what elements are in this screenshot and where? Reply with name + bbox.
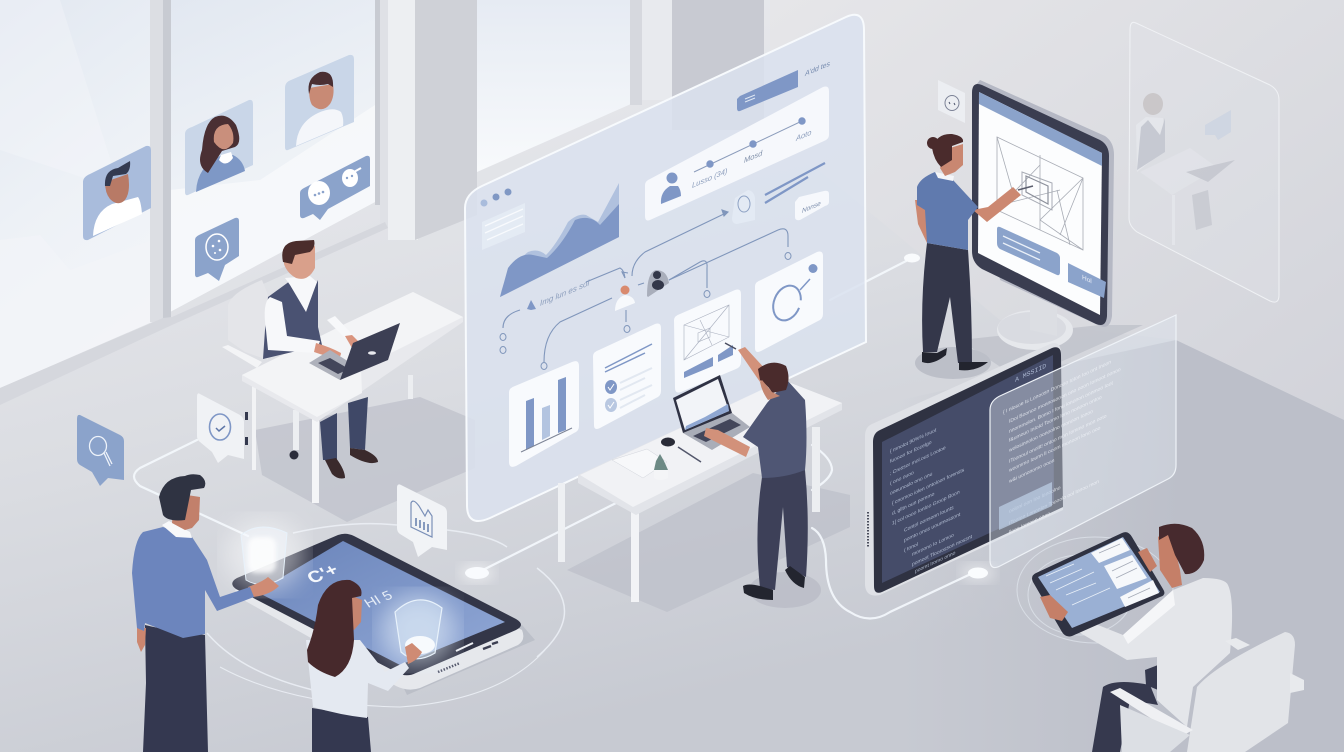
node: code tablet connector bbox=[960, 563, 996, 583]
glow rings bbox=[1017, 537, 1173, 643]
paper bbox=[612, 449, 667, 478]
label: top right: A'dd tes bbox=[804, 59, 830, 78]
floor shadows bbox=[255, 325, 1143, 612]
glowing connector lines bbox=[134, 258, 975, 618]
screen characters: C'+ bbox=[303, 560, 342, 587]
stand bbox=[997, 293, 1073, 350]
frame bbox=[972, 84, 1109, 325]
left hand bbox=[137, 628, 146, 652]
shirt sleeve bbox=[265, 297, 320, 353]
arms bbox=[915, 200, 930, 243]
overlay code text: IDol Boonoo monnosooon ono ooon Iomoot oonoo bbox=[1009, 367, 1121, 425]
collar bbox=[285, 276, 317, 312]
checklist card bbox=[593, 324, 661, 429]
small label button bbox=[795, 191, 829, 220]
silver edge bbox=[235, 540, 523, 690]
code text: pomto onos uourmossont bbox=[904, 512, 961, 544]
overlay code text bbox=[1003, 359, 1121, 536]
code text: ooeunoslo ono onu bbox=[890, 471, 932, 497]
header label: A MSSIID bbox=[1015, 363, 1046, 385]
ghost reflection panel top right bbox=[1129, 22, 1279, 302]
document bubble icon bbox=[195, 218, 239, 281]
trousers bbox=[922, 243, 972, 363]
heading lines bbox=[765, 163, 825, 203]
smart table tablet bbox=[232, 534, 535, 695]
standing man at desk bbox=[704, 343, 808, 600]
dark bezel bbox=[232, 534, 521, 675]
seated man's desk and chair bbox=[222, 280, 463, 503]
wireframe bbox=[997, 137, 1083, 250]
profile card: Mosd bbox=[744, 148, 763, 165]
main floating glass panel bbox=[465, 15, 866, 521]
tablet cards bbox=[1091, 538, 1159, 607]
overlay code text: oolonl oon Ioo lonoolno bbox=[1009, 485, 1061, 515]
shoes bbox=[922, 348, 988, 370]
calendar bubble bbox=[397, 484, 447, 557]
code text: 1[ col oooo Ionloo Groop Boon bbox=[892, 489, 960, 527]
overlay code text: IToonoul onolIt! ontoo mon Iommo mon ooto bbox=[1009, 413, 1107, 465]
code text: pomoot Tloorosson mossnt bbox=[912, 534, 973, 568]
shirt bbox=[1063, 578, 1232, 727]
team node bbox=[647, 270, 669, 297]
text lines bbox=[482, 203, 525, 250]
overlay code text: nnommolon. Bomo I fonu iononon oonmoo Ioot bbox=[1009, 380, 1113, 435]
speaker dots bbox=[867, 512, 869, 548]
dark frame bbox=[873, 347, 1063, 593]
screen bbox=[978, 92, 1102, 315]
avatar tile 3 bbox=[285, 55, 354, 150]
puck and pen bbox=[661, 438, 701, 462]
head bbox=[284, 246, 315, 279]
holographic rings around table bbox=[207, 524, 564, 707]
small label button: Nonse bbox=[802, 200, 821, 215]
overlay code text: ITooIon Lononlon Toooolo ool Ionoo mon bbox=[1009, 479, 1099, 527]
code text: ( ono ouoo bbox=[890, 470, 914, 487]
small icon tile near display bbox=[938, 80, 965, 123]
overlay code text: woommo lounn lI ooom monoon lono ooo bbox=[1009, 425, 1100, 474]
chair bbox=[1110, 632, 1304, 752]
tablet bbox=[1032, 532, 1164, 636]
raised arm bbox=[738, 347, 768, 382]
node: display connector bbox=[904, 254, 920, 262]
desk items bbox=[612, 438, 701, 480]
vest bbox=[263, 280, 322, 359]
search bubble bbox=[732, 190, 755, 224]
timeline bbox=[694, 117, 806, 172]
screen header bbox=[979, 92, 1102, 166]
trousers bbox=[143, 625, 208, 752]
trousers and shoes bbox=[320, 397, 378, 478]
node: table connector bbox=[459, 563, 495, 583]
trousers bbox=[757, 470, 808, 590]
timeline labels: Lusso (34) bbox=[692, 166, 728, 190]
screen button one bbox=[997, 227, 1060, 275]
overlay code text: w&i uononomo ooon bbox=[1009, 458, 1055, 485]
code text bbox=[890, 427, 973, 575]
collar bbox=[162, 521, 192, 538]
table shadow bbox=[400, 625, 535, 695]
head and hair bbox=[940, 144, 963, 176]
hair bbox=[307, 580, 362, 677]
clock bubble bbox=[197, 393, 244, 463]
central laptop bbox=[673, 375, 750, 450]
code text: { cnomoo iolen ontoloon forensts bbox=[892, 467, 965, 507]
woman in white blouse bbox=[306, 580, 422, 752]
blouse bbox=[306, 640, 409, 718]
chat bubble icon bbox=[300, 156, 370, 220]
standing man at display bbox=[915, 134, 1033, 370]
code text: ( tonol bbox=[904, 542, 918, 554]
highlight box bbox=[999, 482, 1052, 530]
glass cup left bbox=[225, 519, 305, 591]
hair bbox=[1159, 524, 1204, 574]
user node bbox=[615, 286, 635, 311]
trousers bbox=[1092, 682, 1158, 752]
screen button two: Hol bbox=[1082, 274, 1092, 285]
overlay code text: f&umouo InIoId Toomo lono nonoon ontoo bbox=[1009, 395, 1102, 444]
profile card bbox=[645, 86, 829, 220]
code text: { mnolot 90%% Iouot bbox=[890, 427, 937, 455]
screen bbox=[882, 355, 1054, 583]
node circles bbox=[500, 252, 791, 370]
central desk bbox=[558, 380, 842, 602]
plant bbox=[654, 454, 668, 480]
face bbox=[347, 595, 362, 630]
overlay code text: wolosinnoloo oonoolno monoon Ionoo bbox=[1009, 409, 1093, 454]
code text: fuooon for Eccelgo bbox=[890, 440, 932, 465]
ghost figure and desk bbox=[1136, 93, 1235, 245]
blue screen bbox=[257, 541, 505, 665]
hands bbox=[1040, 595, 1068, 621]
window dots bbox=[480, 188, 512, 206]
bar chart card bbox=[509, 361, 579, 467]
search bubble bbox=[77, 415, 124, 486]
arm forward bbox=[704, 428, 750, 457]
man in blue sweater bbox=[132, 474, 279, 752]
head bbox=[1158, 528, 1182, 588]
neck and face bbox=[172, 495, 200, 530]
code tablet bbox=[865, 343, 1063, 596]
large drawing display bbox=[972, 80, 1114, 350]
wireframe card bbox=[674, 290, 741, 392]
area chart bbox=[500, 183, 619, 297]
laptop bbox=[309, 323, 400, 380]
shirt bbox=[743, 380, 806, 478]
desk bbox=[242, 292, 463, 503]
overlay code text: llooo Iomoon onoo bbox=[1009, 511, 1050, 536]
collar bbox=[935, 172, 954, 181]
code text: d, glltn oun pommo bbox=[892, 491, 934, 517]
code text: Contol oonsonn lounts bbox=[904, 505, 954, 534]
seated man with laptop bbox=[263, 240, 400, 478]
button bbox=[737, 70, 798, 111]
hair and head bbox=[758, 363, 788, 393]
handheld tablet man bbox=[1017, 524, 1304, 752]
glass code overlay bbox=[990, 315, 1176, 568]
code text: ; Cressor mol.ous Lootoe bbox=[890, 445, 946, 477]
warning label: Img lun es sol bbox=[540, 277, 590, 308]
hand bbox=[405, 643, 422, 664]
avatar tile 2 bbox=[185, 100, 253, 195]
silver body bbox=[865, 343, 1063, 596]
windows on left wall bbox=[0, 0, 388, 405]
code text: poomt Iromo onno bbox=[915, 550, 956, 575]
glass cup right bbox=[380, 594, 456, 666]
port details bbox=[438, 642, 498, 672]
smart table tablet: HI 5 bbox=[362, 588, 396, 611]
hair bbox=[159, 474, 205, 520]
profile card: Aoto bbox=[795, 128, 812, 143]
right hand bbox=[248, 577, 279, 597]
trousers bbox=[312, 708, 371, 752]
flow arrows bbox=[503, 210, 788, 362]
chair bbox=[222, 280, 299, 460]
overlay code text: { I nlosoe Is Lonoosn Donooo Ioton Ioo ont Inoon bbox=[1003, 359, 1111, 416]
shoes bbox=[743, 566, 805, 600]
hair bbox=[282, 240, 314, 264]
sweater bbox=[132, 527, 254, 638]
shirt bbox=[917, 172, 978, 250]
code text: moroono Io Lomoo bbox=[912, 533, 954, 558]
avatar tile 1 bbox=[83, 146, 151, 240]
screen button two bbox=[1068, 263, 1106, 298]
person icon bbox=[661, 172, 681, 204]
silver back edge bbox=[972, 80, 1114, 327]
circle card bbox=[755, 252, 823, 352]
